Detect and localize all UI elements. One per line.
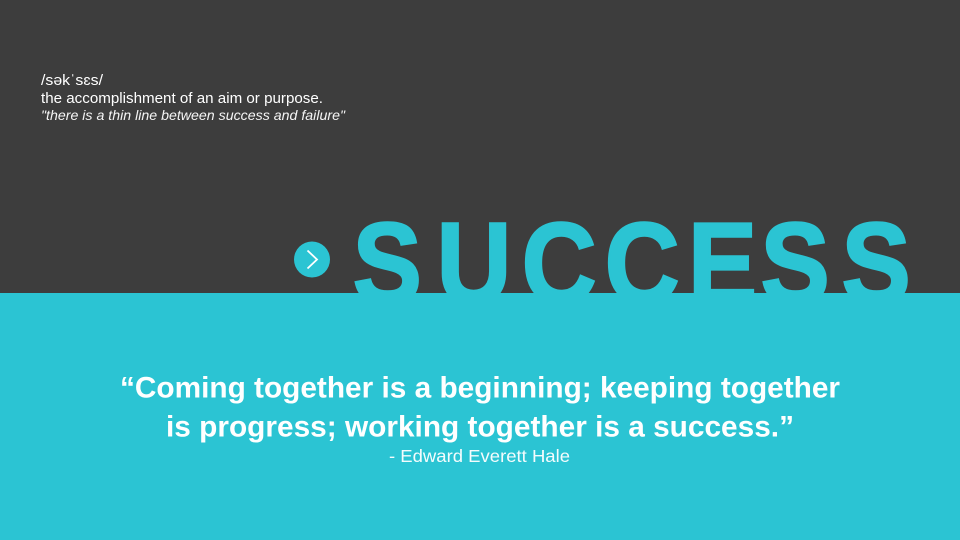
definition text block	[41, 73, 346, 123]
quote text block	[120, 372, 840, 466]
heading: success: SUCCESS	[353, 200, 911, 328]
definition: the accomplishment of an aim or purpose.	[41, 91, 323, 107]
panel: dark background	[0, 0, 960, 293]
phonetic spelling: /səkˈsɛs/	[41, 73, 104, 89]
quote line 2: is progress; working together is a success.”	[166, 410, 794, 444]
attribution: - Edward Everett Hale	[389, 446, 570, 466]
icon: chevron circle	[294, 242, 330, 278]
panel: teal quote band	[0, 293, 960, 540]
example sentence: "there is a thin line between success and failure"	[41, 107, 346, 123]
quote line 1: “Coming together is a beginning; keeping together	[120, 372, 840, 404]
